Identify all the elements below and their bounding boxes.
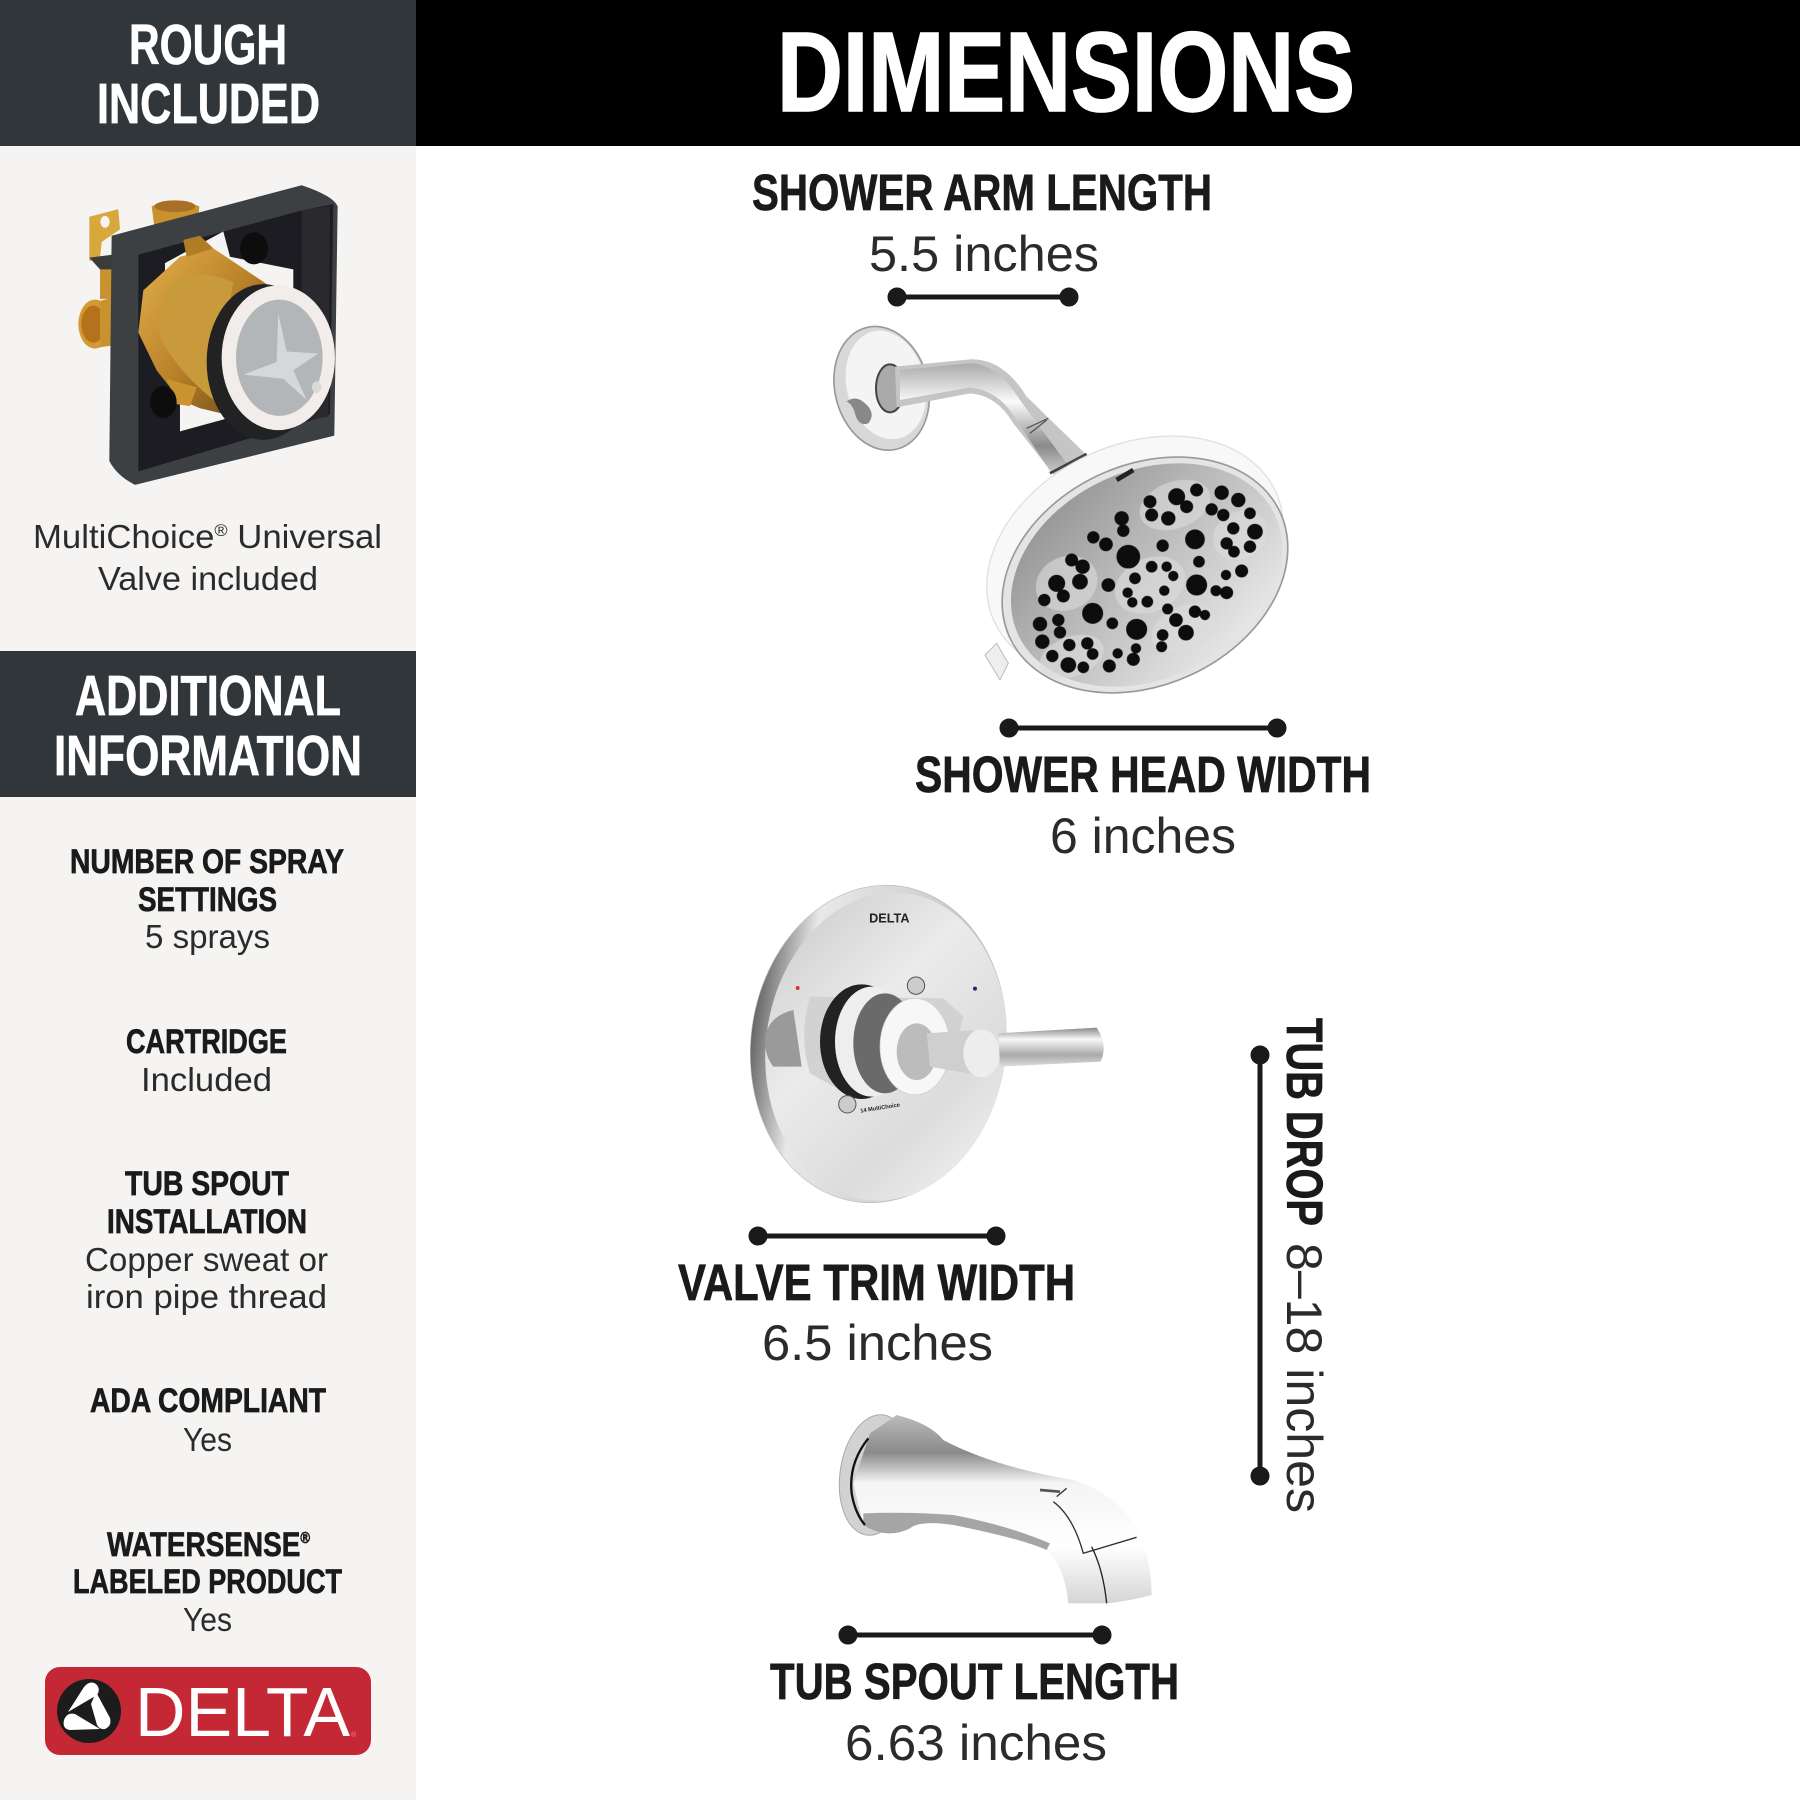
head rim [963, 412, 1326, 738]
spec: ada compliant: Yes [183, 1421, 232, 1458]
dimension line: tub drop [1251, 1046, 1269, 1485]
label: shower arm length: 5.5 inches [869, 226, 1099, 282]
spec: watersense labeled product: LABELED PRODUCT [73, 1563, 342, 1601]
dimension line: valve trim [749, 1227, 1005, 1245]
trim plate rim [730, 868, 1027, 1219]
spout underside shading [863, 1513, 1050, 1550]
label: shower head width [915, 746, 1371, 864]
spray clusters [1027, 471, 1276, 687]
spec: ada compliant [90, 1382, 326, 1458]
head face [974, 421, 1319, 729]
caption: valve included: MultiChoice [33, 518, 205, 555]
spec: tub spout installation [85, 1165, 328, 1315]
dimension line: shower arm [888, 288, 1078, 306]
spec: cartridge: Included [141, 1061, 272, 1098]
logo: delta: ® [351, 1731, 357, 1739]
image: valve trim: DELTA [869, 912, 909, 926]
title: dimensions: DIMENSIONS [777, 9, 1355, 135]
caption: valve included: Universal [228, 518, 382, 555]
spec: watersense labeled product [73, 1526, 342, 1638]
image: valve trim [730, 868, 1104, 1219]
spec: cartridge [126, 1023, 287, 1098]
caption: valve included: Valve included [98, 560, 318, 597]
caption: valve included: ® [214, 521, 228, 540]
arm [895, 359, 1087, 478]
spec: tub spout installation: iron pipe thread [86, 1278, 327, 1315]
spec: ada compliant: ADA COMPLIANT [90, 1382, 326, 1420]
panel heading: rough included [0, 0, 416, 146]
collar [804, 997, 963, 1090]
caption: valve included [33, 518, 382, 597]
image: shower head and arm [821, 316, 1326, 738]
label: shower arm length: SHOWER ARM LENGTH [752, 164, 1212, 221]
multichoice mark: 14 MultiChoice [860, 1102, 900, 1115]
spec: number of spray settings: SETTINGS [138, 881, 277, 919]
spray nozzles [1034, 485, 1262, 672]
image: rough-in valve [78, 185, 338, 485]
spec: tub spout installation: Copper sweat or [85, 1241, 328, 1278]
label: tub drop: 8–18 inches [1276, 1243, 1332, 1513]
panel heading: additional information [0, 651, 416, 797]
handle [927, 1030, 987, 1077]
logo: delta [45, 1667, 371, 1755]
label: tub drop [1276, 1018, 1333, 1513]
header: dimensions [416, 0, 1800, 146]
label: tub spout length: 6.63 inches [845, 1715, 1107, 1771]
label: valve trim width [678, 1254, 1075, 1371]
head back shell [947, 390, 1323, 723]
spec: number of spray settings: 5 sprays [145, 918, 270, 955]
spec: watersense labeled product: ® [300, 1530, 310, 1547]
spec: number of spray settings: NUMBER OF SPRAY [70, 843, 344, 881]
spec: watersense labeled product: Yes [183, 1601, 232, 1638]
label: shower arm length [752, 164, 1212, 282]
label: tub drop: TUB DROP [1276, 1018, 1333, 1226]
label: valve trim width: VALVE TRIM WIDTH [678, 1254, 1075, 1311]
label: shower head width: 6 inches [1050, 808, 1236, 864]
spec: watersense labeled product: WATERSENSE [107, 1526, 343, 1564]
spec: number of spray settings [70, 843, 344, 955]
label: shower head width: SHOWER HEAD WIDTH [915, 746, 1371, 803]
dimension line: shower head [1000, 719, 1286, 737]
label: tub spout length [770, 1653, 1179, 1771]
trim plate face [746, 877, 1026, 1216]
spec: cartridge: CARTRIDGE [126, 1023, 287, 1061]
label: tub spout length: TUB SPOUT LENGTH [770, 1653, 1179, 1710]
label: valve trim width: 6.5 inches [762, 1315, 993, 1371]
spec: tub spout installation: TUB SPOUT [125, 1165, 289, 1203]
flange [821, 316, 942, 460]
panel heading: additional information: INFORMATION [54, 724, 362, 788]
spec: tub spout installation: INSTALLATION [107, 1203, 307, 1241]
panel heading: rough included: INCLUDED [97, 72, 320, 136]
panel: left sidebar background [0, 0, 416, 1800]
image: tub spout [832, 1410, 1152, 1603]
panel heading: rough included: ROUGH [129, 13, 287, 77]
dimension line: tub spout [839, 1626, 1111, 1644]
panel heading: additional information: ADDITIONAL [75, 664, 341, 728]
logo: delta: DELTA [135, 1673, 350, 1751]
